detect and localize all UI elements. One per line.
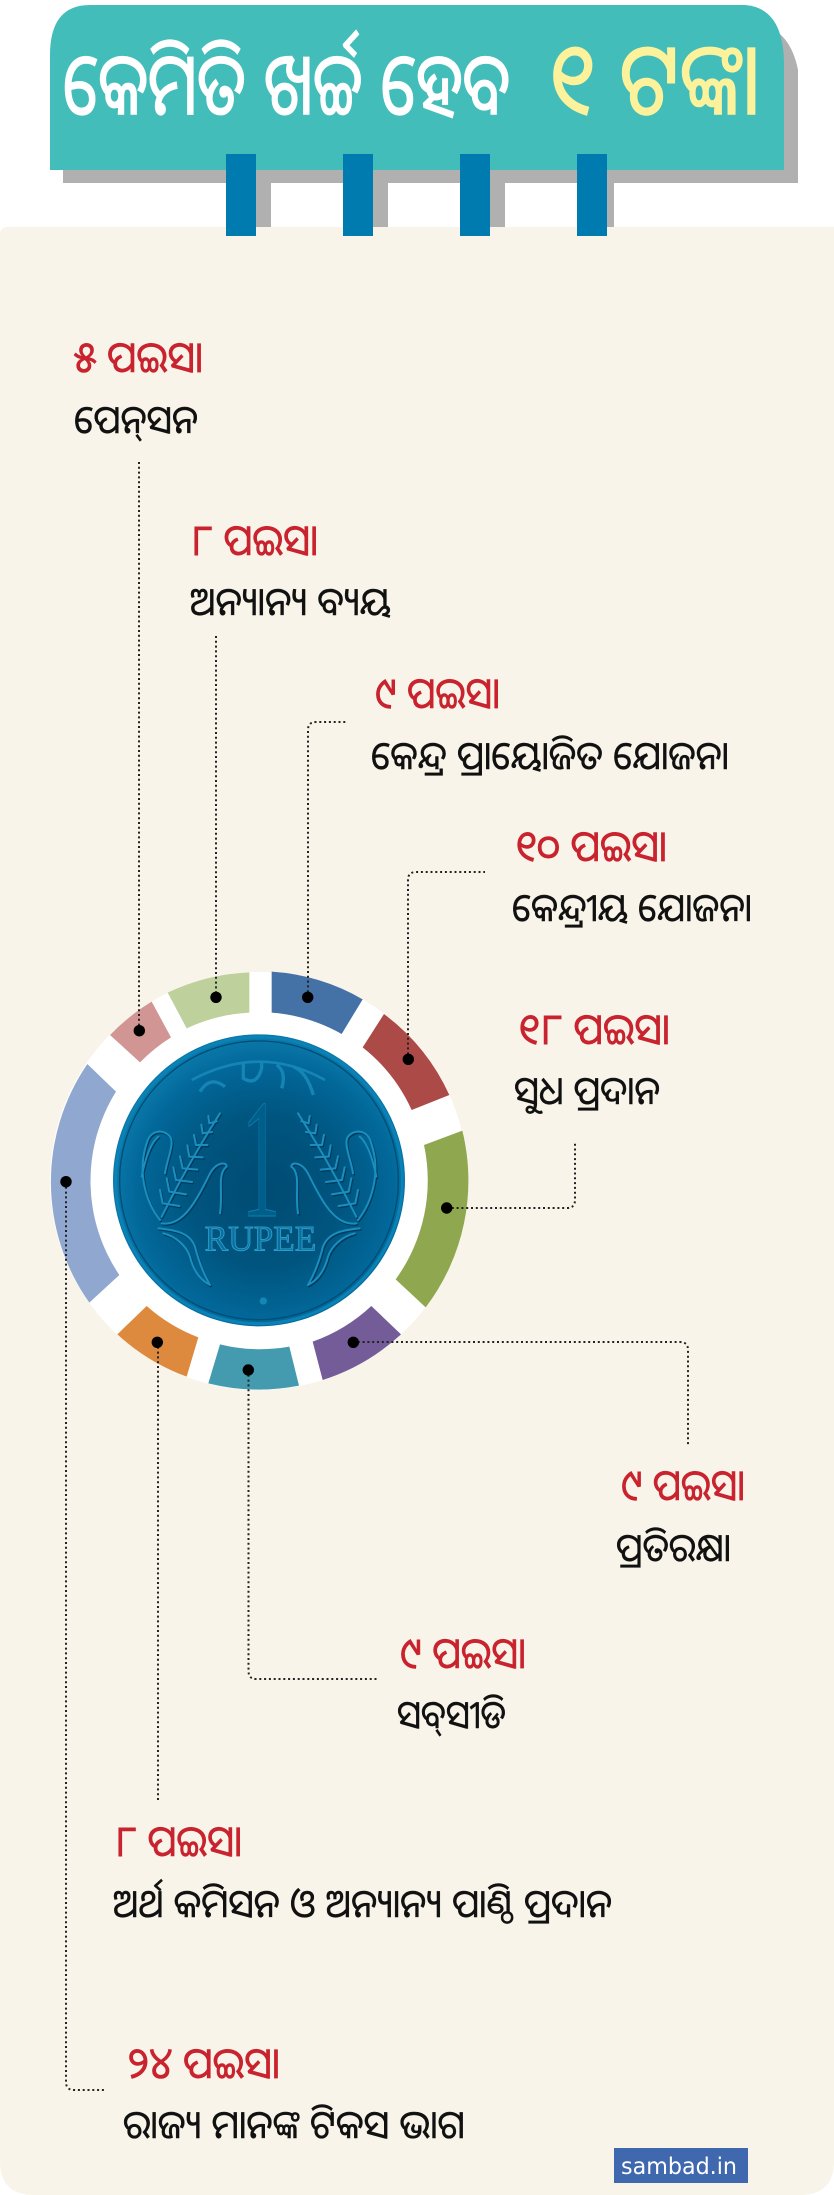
credit badge <box>614 2148 748 2183</box>
label: interest payment: ସୁଧ ପ୍ରଦାନ <box>514 1070 660 1114</box>
label: central schemes <box>512 823 752 930</box>
label: subsidy: ସବ୍‌ସୀଡି <box>397 1694 506 1737</box>
segment: defence <box>313 1306 401 1380</box>
label: pension: ପେନ୍‌ସନ <box>74 399 198 442</box>
connector: subsidy <box>248 1370 377 1679</box>
label: interest payment <box>514 1006 670 1114</box>
segment: subsidy <box>208 1344 299 1390</box>
label: centrally sponsored schemes <box>371 670 729 778</box>
segment: central sector <box>272 972 363 1034</box>
connector: defence <box>353 1342 688 1446</box>
label: states tax share: ରାଜ୍ୟ ମାନଙ୍କ ଟିକସ ଭାଗ <box>123 2104 465 2147</box>
label: subsidy: ୯ ପଇସା <box>400 1630 526 1678</box>
label: centrally sponsored schemes: କେନ୍ଦ୍ର ପ୍ରାୟୋଜିତ ଯୋଜନା <box>371 735 729 778</box>
label: other expenses <box>190 517 391 624</box>
label: finance commission <box>113 1818 612 1926</box>
label: states tax share <box>123 2040 465 2147</box>
label: pension: ୫ ପଇସା <box>74 334 203 382</box>
title text: କେମିତି ଖର୍ଚ୍ଚ ହେବ <box>63 30 510 133</box>
connector: finance commission <box>157 1342 159 1800</box>
label: defence: ୯ ପଇସା <box>621 1462 745 1510</box>
header: title sign <box>50 5 798 236</box>
connector: central plans <box>408 872 485 1059</box>
label: central schemes: ୧୦ ପଇସା <box>515 823 667 871</box>
segment: finance commission <box>117 1306 198 1377</box>
white ring <box>50 972 468 1390</box>
label: finance commission: ୮ ପଇସା <box>115 1818 242 1866</box>
label: other expenses: ଅନ୍ୟାନ୍ୟ ବ୍ୟୟ <box>190 581 391 624</box>
coin: one rupee: 1 <box>242 1065 280 1253</box>
connector: centrally sponsored <box>308 722 348 997</box>
connector: pension <box>138 462 140 1031</box>
ring segments <box>51 972 468 1390</box>
title amount: ୧ ଟଙ୍କା <box>548 24 760 136</box>
label: centrally sponsored schemes: ୯ ପଇସା <box>375 670 500 718</box>
segment: central plans <box>363 1014 449 1110</box>
label: pension <box>74 334 203 442</box>
coin: one rupee <box>113 1034 405 1326</box>
segment: states share <box>51 1064 119 1303</box>
blue tabs <box>226 154 607 236</box>
marker dots <box>60 992 452 1376</box>
credit badge: sambad.in <box>621 2154 737 2180</box>
segment: other expenses <box>168 972 249 1028</box>
coin label: RUPEE <box>205 1219 316 1259</box>
donut ring with coin <box>50 972 468 1390</box>
label: central schemes: କେନ୍ଦ୍ରୀୟ ଯୋଜନା <box>512 887 752 930</box>
label: defence: ପ୍ରତିରକ୍ଷା <box>616 1527 731 1570</box>
label: states tax share: ୨୪ ପଇସା <box>127 2040 280 2088</box>
segment: interest <box>396 1131 468 1307</box>
segment: pension <box>110 1002 171 1062</box>
connector: other expenses <box>215 636 217 997</box>
label: subsidy <box>397 1630 526 1737</box>
header banner <box>50 5 784 170</box>
label: interest payment: ୧୮ ପଇସା <box>518 1006 670 1054</box>
label: finance commission: ଅର୍ଥ କମିସନ ଓ ଅନ୍ୟାନ୍ୟ ପାଣ୍ଠି ପ୍ରଦାନ <box>113 1879 612 1926</box>
connector: interest <box>447 1142 575 1208</box>
label: other expenses: ୮ ପଇସା <box>191 517 318 565</box>
label: defence <box>616 1462 745 1570</box>
connector: states share <box>66 1182 105 2090</box>
tab shadows <box>256 183 614 227</box>
header shadow <box>63 25 798 183</box>
